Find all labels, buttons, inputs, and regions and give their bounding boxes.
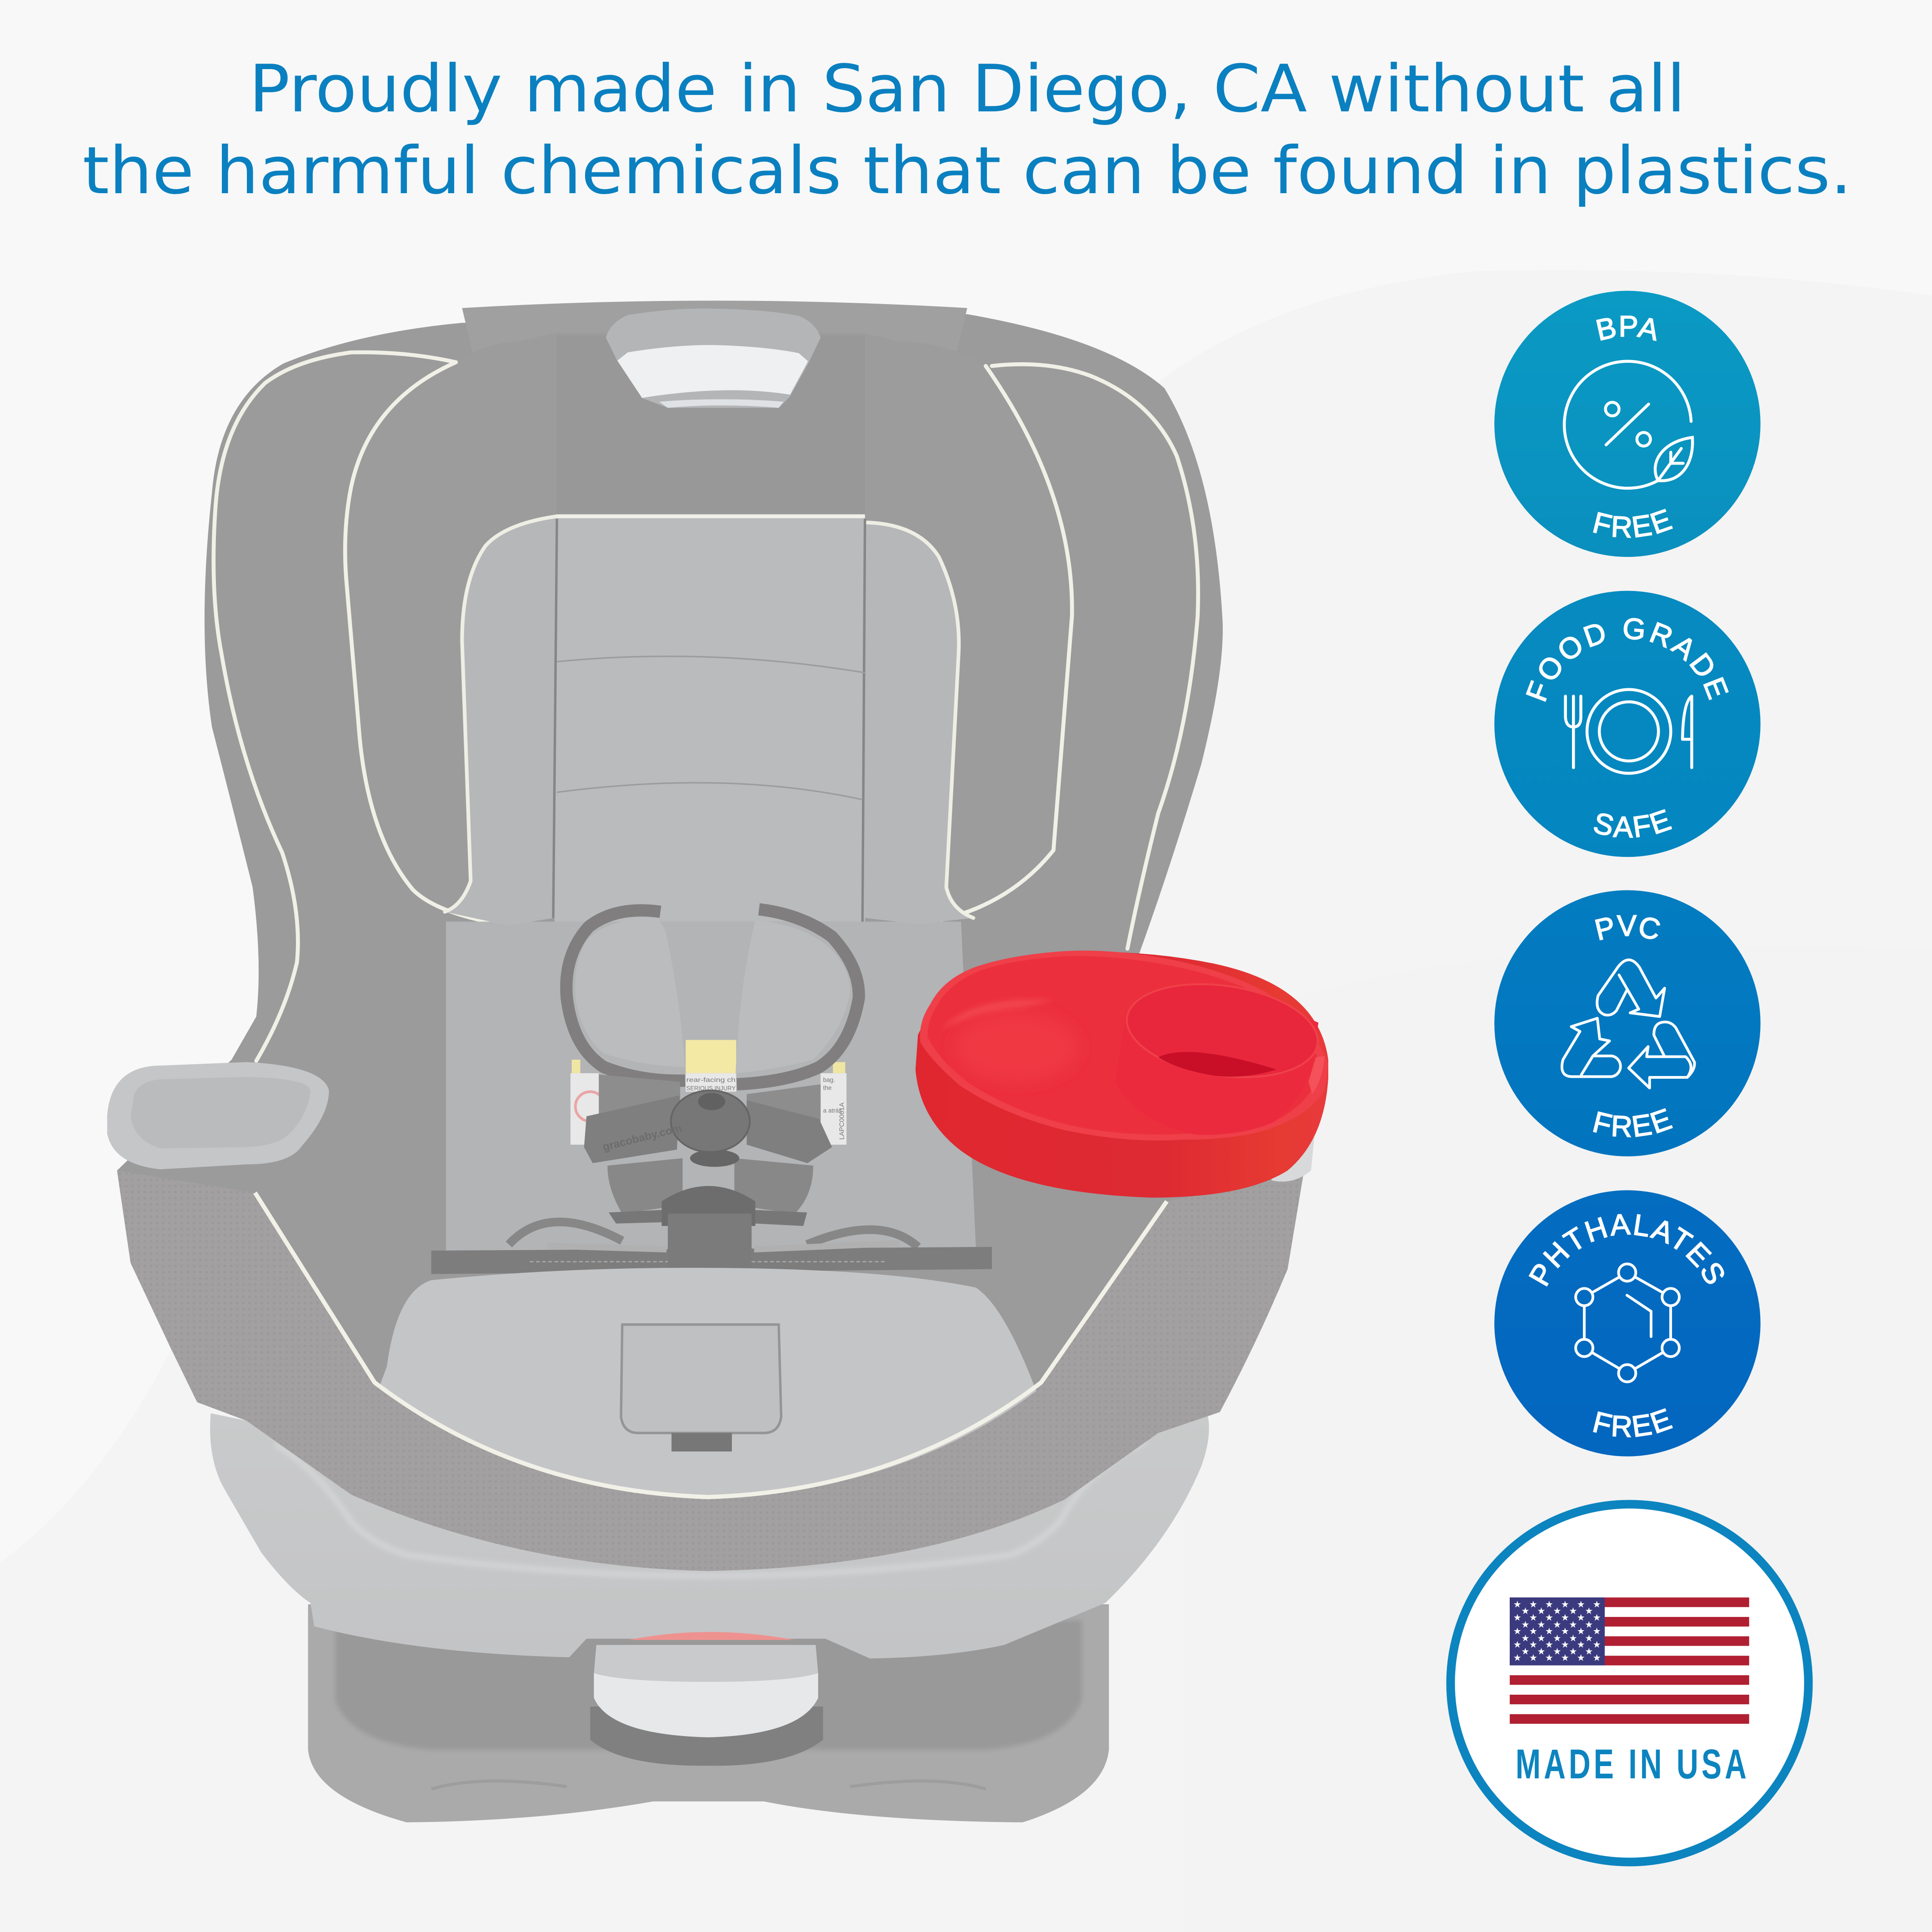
title (83, 51, 1852, 209)
small label text: a atrás (823, 1107, 842, 1114)
badge: PVC free (1494, 890, 1761, 1156)
crotch pad (621, 1325, 781, 1452)
release pedal (590, 1645, 823, 1766)
tray bowl (928, 956, 1321, 1135)
right side fabric (1041, 1173, 1304, 1500)
badge: food grade safe (1494, 591, 1761, 857)
pad piping (445, 516, 973, 918)
badge text: PHTHALATES: PHTHALATES (1522, 1207, 1733, 1291)
badge: phthalates free (1494, 1190, 1761, 1457)
icon: percent with leaf (1564, 361, 1692, 488)
small label text: the (823, 1084, 831, 1091)
warning labels (571, 1060, 846, 1145)
tray rim (920, 951, 1328, 1141)
icon: hexagon molecule (1576, 1264, 1679, 1382)
bolsters (345, 333, 1072, 926)
badge: made in USA (1451, 1504, 1808, 1862)
small label text: SERIOUS INJURY (686, 1085, 736, 1092)
center panel (553, 516, 865, 921)
small label text (686, 1076, 846, 1140)
small label text: LAPC0061A (839, 1102, 846, 1140)
top band (462, 300, 967, 360)
title: the harmful chemicals that can be found in plastics. (83, 133, 1852, 209)
red snack tray (916, 951, 1328, 1198)
cup well (1121, 973, 1325, 1094)
flag (1510, 1597, 1749, 1724)
badge text: FREE: FREE (1588, 1101, 1678, 1146)
flag: ★★★★★ (1521, 1606, 1593, 1617)
cup well wall (1115, 986, 1318, 1135)
neck panel (557, 335, 865, 532)
tray outer wall (916, 952, 1328, 1198)
left cup holder (107, 1062, 329, 1169)
yellow tag (686, 1040, 736, 1073)
badge text: BPA: BPA (1593, 310, 1662, 347)
wing piping (214, 352, 1198, 1061)
harness webbing and buckle (431, 1075, 992, 1274)
flag: ★★★★★★ (1513, 1599, 1601, 1610)
tray mount (1269, 1134, 1315, 1181)
front fabric (351, 1382, 1065, 1571)
left side fabric (117, 1171, 375, 1495)
badge text: FREE: FREE (1588, 501, 1678, 546)
badge text: FREE: FREE (1588, 1401, 1678, 1446)
harness webbing and buckle: gracobaby.com (601, 1122, 683, 1153)
flag: ★★★★★★ (1513, 1652, 1601, 1663)
left pad (445, 516, 557, 926)
icon: recycle arrows (1562, 960, 1695, 1088)
carry handle (606, 309, 821, 408)
center label (686, 1073, 736, 1091)
made in USA label: MADE IN USA (1516, 1741, 1747, 1788)
upholstery body (117, 314, 1309, 1571)
flag: ★★★★★ (1521, 1646, 1593, 1657)
badge text: SAFE: SAFE (1589, 802, 1677, 846)
flag: ★★★★★★ (1513, 1639, 1601, 1650)
icon: plate and cutlery (1566, 690, 1692, 773)
title: Proudly made in San Diego, CA without all (249, 51, 1686, 127)
badge text: FOOD GRADE: FOOD GRADE (1519, 611, 1736, 706)
right pad (865, 522, 973, 924)
lower back insert (446, 921, 976, 1252)
small label text: rear-facing ch (686, 1076, 736, 1083)
flag: ★★★★★ (1521, 1632, 1593, 1643)
badge text: PVC: PVC (1592, 909, 1663, 946)
seat piping (255, 1193, 1167, 1497)
flag: ★★★★★★ (1513, 1612, 1601, 1623)
small label text: bag. (823, 1076, 835, 1083)
flag: ★★★★★ (1521, 1619, 1593, 1630)
car seat (107, 300, 1309, 1822)
seat shell (210, 1413, 1209, 1658)
flag: ★★★★★★ (1513, 1626, 1601, 1637)
chest pads (566, 909, 859, 1084)
seat cushion (380, 1268, 1036, 1497)
seat base (308, 1604, 1109, 1822)
badge: BPA free (1494, 291, 1761, 557)
